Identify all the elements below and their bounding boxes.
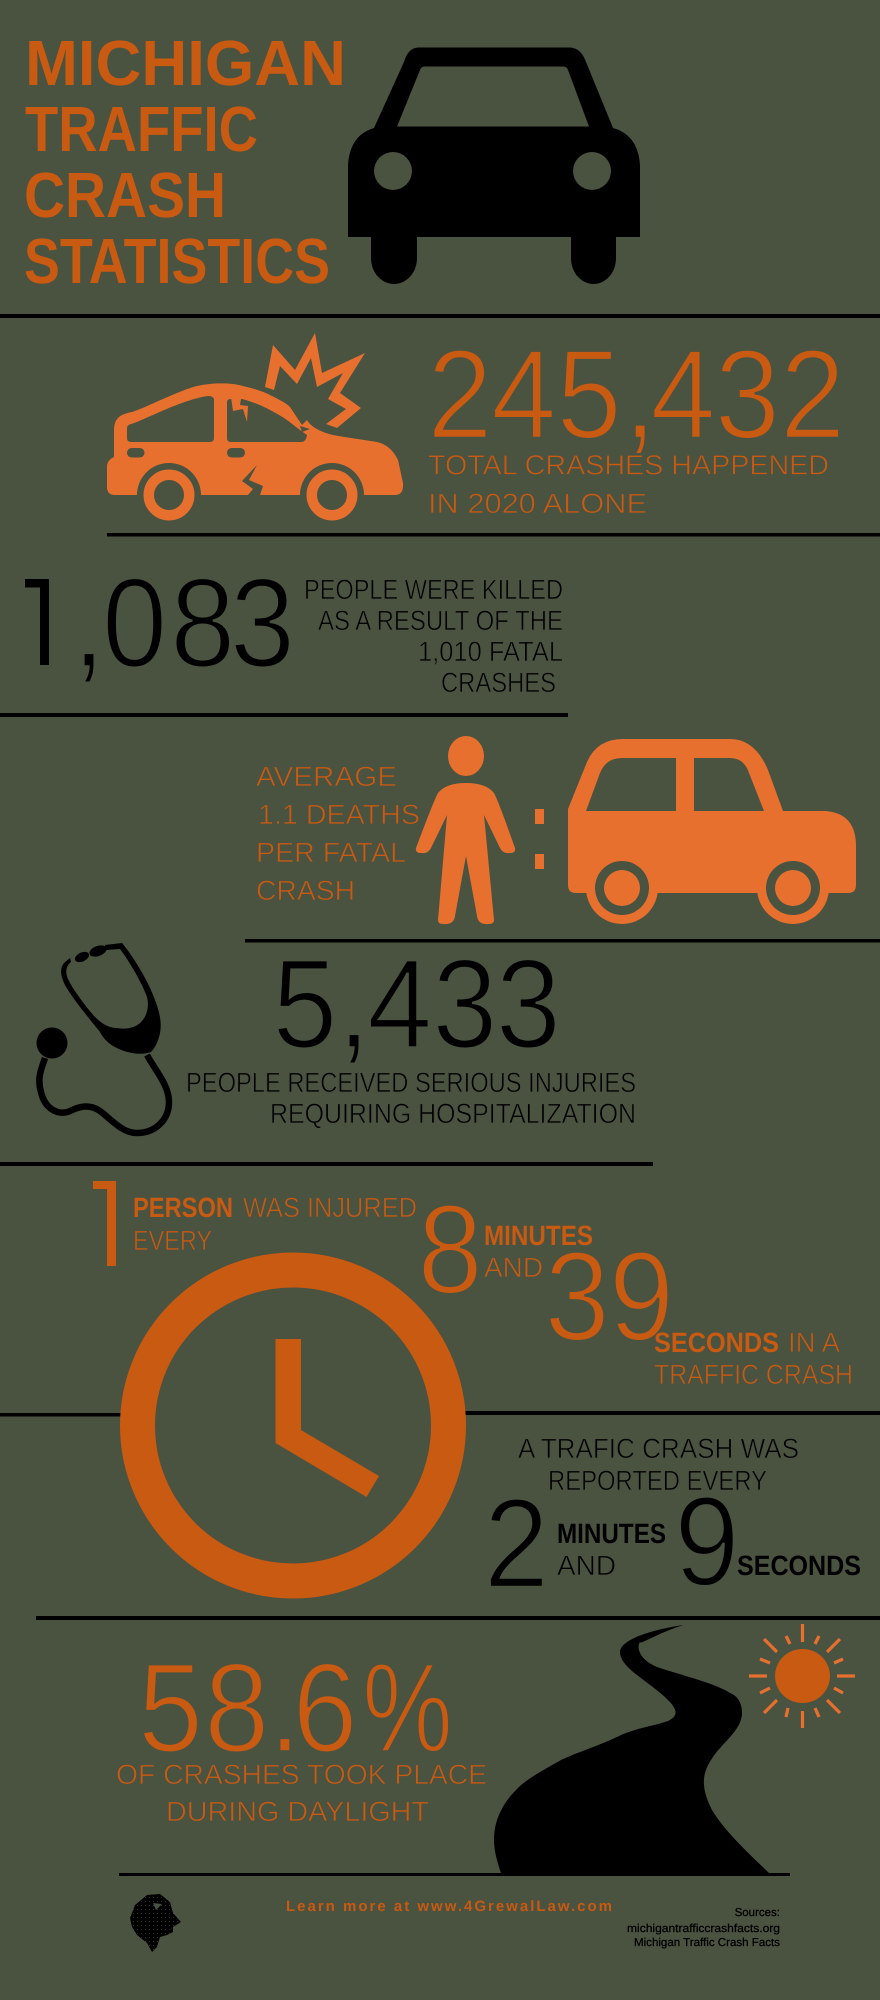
stat: 8 minutes and 39 seconds: 39: [545, 1225, 674, 1367]
text: daylight: OF CRASHES TOOK PLACE: [116, 1759, 487, 1790]
text: people killed: 1,010 FATAL: [418, 636, 563, 667]
stat: 2 minutes and 9 seconds: AND: [557, 1550, 616, 1581]
text: people killed: AS A RESULT OF THE: [318, 605, 563, 636]
text: crash reported every: REPORTED EVERY: [548, 1465, 767, 1496]
stat: 2 minutes and 9 seconds: 2: [484, 1472, 549, 1614]
text: serious injuries: PEOPLE RECEIVED SERIOUS INJURIES: [186, 1067, 636, 1098]
stat: 1 person injured: 1: [73, 1151, 144, 1293]
stat: 58.6%: 58.6: [138, 1636, 358, 1778]
footer link: Learn more at www.4GrewalLaw.com: [286, 1898, 612, 1915]
icon: lion logo: [130, 1894, 181, 1952]
stat: 1 person injured: [93, 1181, 416, 1266]
text: crash reported every: A TRAFIC CRASH WAS: [518, 1433, 799, 1464]
text: people killed: CRASHES: [441, 667, 556, 698]
text: average deaths: AVERAGE: [256, 761, 397, 792]
stat: 8 minutes and 39 seconds: TRAFFIC CRASH: [654, 1359, 853, 1390]
stat: 8 minutes and 39 seconds: 8: [418, 1178, 483, 1320]
sources: Michigan Traffic Crash Facts: [634, 1937, 780, 1949]
stat: 5,433: 5,433: [272, 932, 561, 1074]
stat: 58.6%: %: [362, 1636, 453, 1778]
stat: 2 minutes and 9 seconds: [484, 1470, 861, 1614]
text: average deaths: CRASH: [256, 875, 355, 906]
stat: 58.6%: [138, 1636, 453, 1778]
text: daylight: [116, 1759, 487, 1827]
sources: [627, 1907, 780, 1949]
text: people killed: [304, 574, 563, 698]
text: serious injuries: [186, 1067, 636, 1129]
icon: winding road: [494, 1625, 769, 1873]
text: average deaths: PER FATAL: [256, 837, 406, 868]
icon: person: [416, 736, 515, 924]
stat: 2 minutes and 9 seconds: 9: [674, 1470, 739, 1612]
title: STATISTICS: [24, 225, 330, 297]
title: MICHIGAN: [25, 27, 346, 99]
stat: 1,083: [25, 579, 289, 682]
ratio colon: [535, 809, 544, 869]
title: [24, 27, 346, 297]
icon: sun: [749, 1624, 855, 1728]
stat: 8 minutes and 39 seconds: [418, 1178, 853, 1390]
stat: 1,083: 1,083: [11, 552, 295, 694]
text: serious injuries: REQUIRING HOSPITALIZATION: [270, 1098, 636, 1129]
text: average deaths: [256, 761, 420, 906]
text: daylight: DURING DAYLIGHT: [166, 1796, 429, 1827]
stat: 1 person injured: PERSON: [133, 1192, 233, 1223]
text: total crashes: TOTAL CRASHES HAPPENED: [428, 450, 829, 480]
stat: 2 minutes and 9 seconds: SECONDS: [737, 1550, 861, 1581]
stat: 245,432: 245,432: [427, 323, 845, 465]
icon: orange car side view: [568, 739, 856, 924]
icon: stethoscope: [36, 943, 169, 1133]
stat: 8 minutes and 39 seconds: SECONDS: [654, 1327, 779, 1358]
text: average deaths: 1.1 DEATHS: [258, 799, 420, 830]
text: total crashes: [428, 450, 829, 519]
text: total crashes: IN 2020 ALONE: [428, 488, 647, 519]
sources: michigantrafficcrashfacts.org: [627, 1923, 780, 1935]
text: people killed: PEOPLE WERE KILLED: [304, 574, 563, 605]
text: crash reported every: [518, 1433, 799, 1496]
stat: 1 person injured: EVERY: [133, 1225, 212, 1256]
sources: Sources:: [735, 1907, 780, 1919]
title: TRAFFIC: [25, 93, 258, 165]
icon: crashed orange car: [100, 333, 410, 527]
stat: 8 minutes and 39 seconds: MINUTES: [484, 1220, 593, 1251]
stat: 2 minutes and 9 seconds: MINUTES: [557, 1518, 666, 1549]
stat: 8 minutes and 39 seconds: IN A: [788, 1327, 840, 1358]
title: CRASH: [24, 159, 226, 231]
icon: black car front view: [348, 48, 640, 284]
icon: clock: [138, 1270, 448, 1581]
stat: 1 person injured: WAS INJURED: [243, 1192, 417, 1223]
stat: 8 minutes and 39 seconds: AND: [484, 1252, 543, 1283]
